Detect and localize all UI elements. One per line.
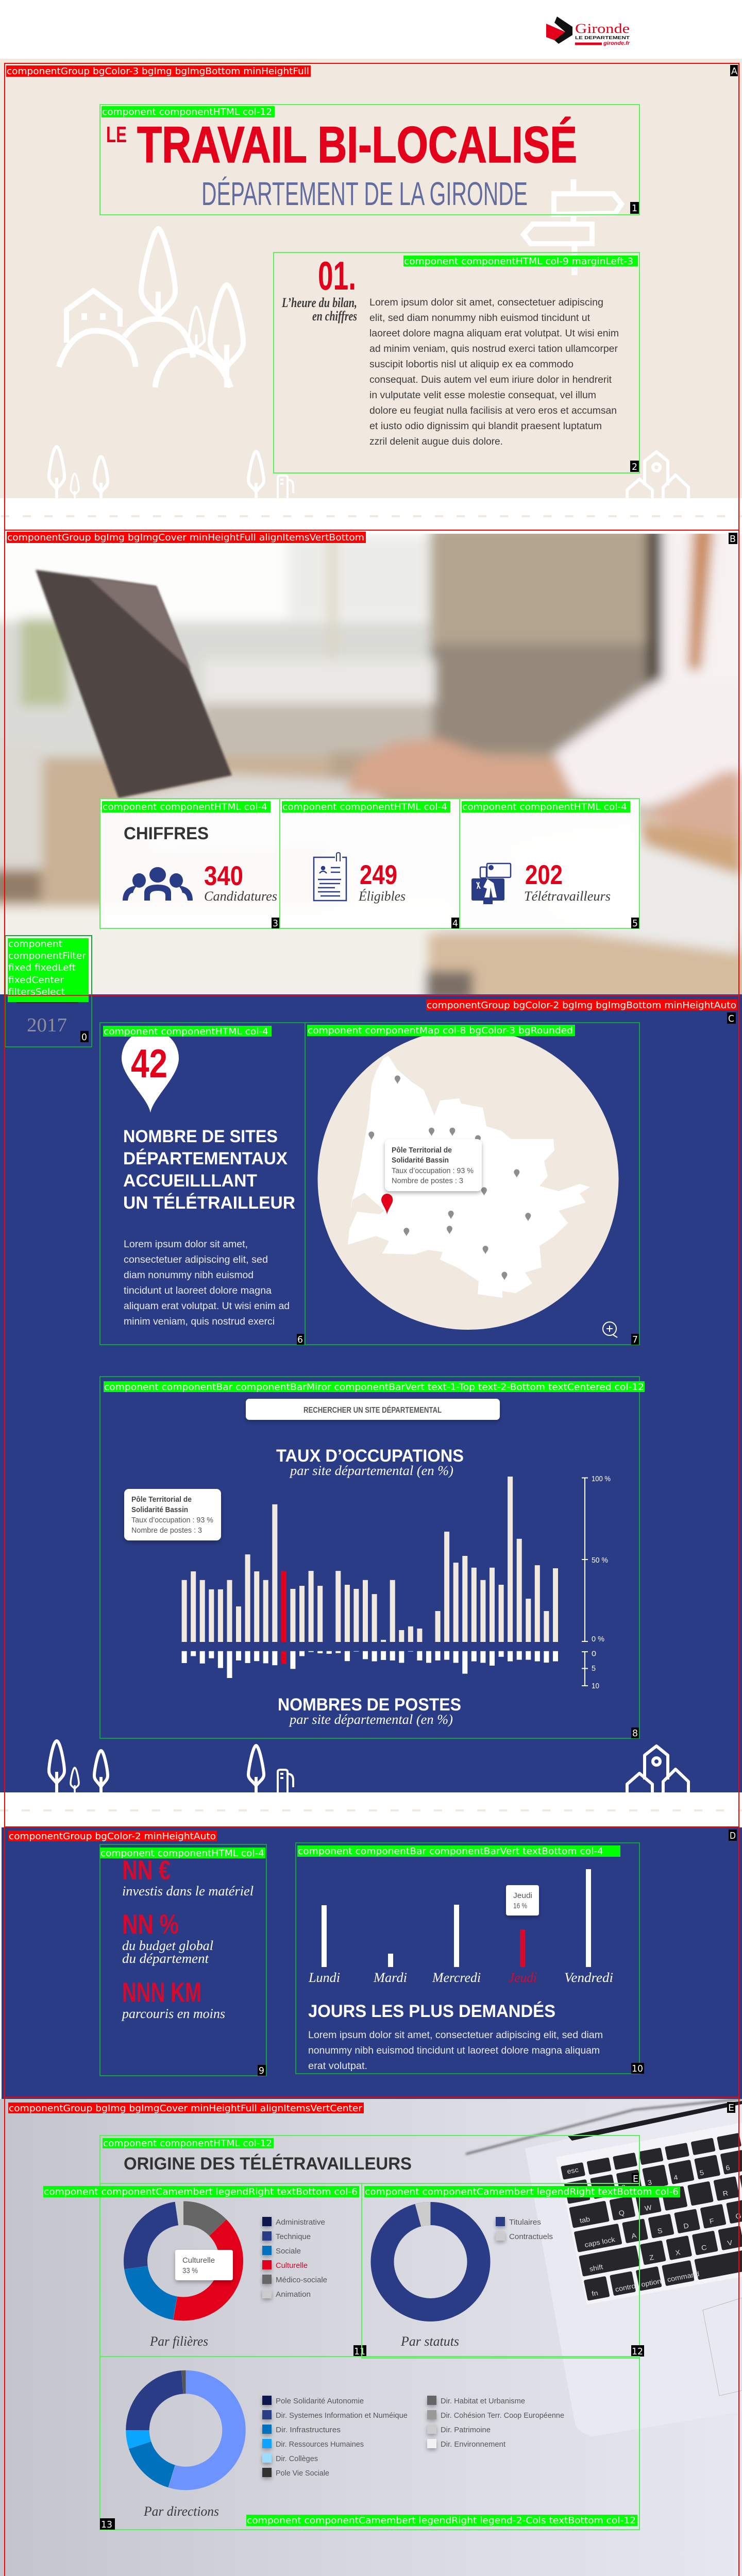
bar chart panel: taux d'occupations et nombres de postes: 8 [632,1728,638,1739]
bar tooltip: Solidarité Bassin [131,1505,188,1514]
dashed road [1,515,742,517]
map tooltip: Nombre de postes : 3 [392,1177,463,1185]
icon: signpost [524,179,621,275]
dashed road [0,1809,742,1811]
panel: jours les plus demandés [296,1843,644,2074]
upper axis: 50 % [592,1556,608,1565]
day bars [322,1869,591,1967]
bar tooltip [124,1489,221,1540]
tag D: componentGroup bgColor-2 minHeightAuto [9,1831,216,1842]
donut: par filières: Par filières [149,2334,208,2349]
day labels: Lundi [308,1970,340,1985]
tag D: D [730,1831,736,1841]
tag B: B [730,534,736,545]
heading: ACCUEILLLANT [123,1171,257,1191]
panel: 42 sites: component componentHTML col-4 [104,1026,268,1037]
tag C: C [728,1013,734,1024]
body text: Lorem ipsum dolor sit amet, consectetuer adipiscing elit, sed diam [308,2030,603,2041]
subtitle: DÉPARTEMENT DE LA GIRONDE [201,175,528,212]
upper bars [182,1477,558,1642]
donut: par statuts [362,2183,680,2358]
panel: key figures [100,1844,266,2076]
panel: chiffres [100,799,640,930]
body text: consectetuer adipiscing elit, sed [124,1255,268,1265]
title panel: 1 [632,203,637,214]
legend: Technique [276,2232,311,2241]
body text: laoreet dolore magna aliquam erat volutpat. Ut wisi enim [369,328,619,339]
day labels [308,1970,613,1985]
donut chart segments [372,2202,490,2321]
map tooltip [385,1139,482,1191]
heading: origine des télétravailleurs: component componentHTML col-12 [103,2138,272,2149]
panel: 42 sites: 6 [297,1334,303,1345]
legend: Dir. Systemes Information et Numéique [276,2411,408,2420]
tag C [426,999,737,1024]
bar tooltip: Taux d’occupation : 93 % [131,1516,213,1524]
icon: document [314,853,346,901]
donut: par directions [100,2357,639,2530]
legend: Contractuels [509,2232,553,2241]
lower axis: 0 [592,1650,596,1658]
body text: consequat. Duis autem vel eum iriure dolor in hendrerit [369,375,612,385]
panel: 42 sites [100,1023,305,1345]
legend: Dir. Ressources Humaines [276,2440,364,2449]
map panel [305,1023,639,1345]
panel: key figures: investis dans le matériel [122,1884,254,1899]
stat: éligibles: 4 [452,918,458,929]
lower mirrored bars [182,1651,558,1678]
stat: candidatures: 340 [204,861,243,891]
tag E: componentGroup bgImg bgImgCover minHeightFull alignItemsVertCenter [9,2103,363,2114]
panel: key figures: NN % [122,1909,179,1940]
keyboard keys [561,2130,742,2301]
chart heading: TAUX D’OCCUPATIONS [276,1446,464,1466]
bar tooltip: Pôle Territorial de [131,1495,192,1504]
legend: Culturelle [276,2261,308,2270]
body text: ad minim veniam, quis nostrud exerci tation ullamcorper [369,344,618,354]
icon: zoom magnifier [603,1322,617,1337]
panel 01: l'heure du bilan: component componentHTML col-9 marginLeft-3 [404,256,633,267]
logo: Gironde le département: Gironde [575,21,630,36]
icon: map pin with number [122,1030,179,1113]
body text: Lorem ipsum dolor sit amet, [124,1239,248,1250]
bar chart panel: taux d'occupations et nombres de postes: par site départemental (en %) [289,1463,453,1478]
panel: key figures: du budget global [122,1938,213,1953]
day labels: Mercredi [432,1970,481,1985]
section C: navy background [0,994,742,1810]
stat: éligibles: Éligibles [358,889,406,904]
legend: Dir. Cohésion Terr. Coop Européenne [441,2411,564,2420]
donut: par filières [43,2183,366,2357]
body text: nonummy nibh euismod tincidunt ut laoreet dolore magna aliquam [308,2045,600,2056]
tag E: E [728,2103,734,2113]
tag A: componentGroup bgColor-3 bgImg bgImgBottom minHeightFull [7,66,309,77]
stat: candidatures: component componentHTML col-4 [103,802,267,812]
grey map pins [368,1076,531,1280]
bar chart panel: taux d'occupations et nombres de postes: component componentBar componentBarMiror componentBarVert text-1-Top text-2-Bottom textCentered col-12 [104,1382,644,1393]
map tooltip: Solidarité Bassin [392,1156,449,1164]
stat: télétravailleurs: Télétravailleurs [524,889,611,904]
donut: par directions: Par directions [143,2504,219,2519]
selected map pin [381,1194,393,1214]
panel 01: l'heure du bilan: 01. [318,253,356,298]
body text [369,297,619,447]
map panel: 7 [632,1334,638,1345]
day labels: Vendredi [564,1970,613,1985]
year filter: component [8,939,62,950]
panel: 42 sites: 42 [131,1041,167,1086]
tooltip: jeudi: Jeudi [513,1891,532,1900]
section A: cream cover [0,59,742,516]
tag A [6,65,738,77]
stat: candidatures: Candidatures [204,889,277,904]
title panel [100,105,639,215]
year filter: 2017 [27,1014,67,1036]
legend: Sociale [276,2247,301,2256]
panel 01: l'heure du bilan: en chiffres [312,309,357,324]
title panel: TRAVAIL BI-LOCALISÉ [137,116,577,173]
donut: par directions: 13 [101,2519,112,2530]
lower axis: 5 [592,1664,596,1673]
icon: people [123,867,193,901]
stat: télétravailleurs: 5 [632,918,638,929]
search box [246,1399,500,1420]
map tooltip: Taux d’occupation : 93 % [392,1166,474,1175]
panel: key figures: NNN KM [122,1977,201,2008]
lower chart heading: NOMBRES DE POSTES [278,1695,461,1715]
trackpad [703,2298,742,2396]
icon: village illustration [59,229,243,387]
donut chart segments [125,2369,246,2491]
heading: chiffres: CHIFFRES [124,824,209,843]
legend: Dir. Patrimoine [441,2426,491,2434]
tag C: componentGroup bgColor-2 bgImg bgImgBottom minHeightAuto [427,1000,736,1011]
body text: Lorem ipsum dolor sit amet, consectetuer adipiscing [369,297,603,308]
donut: par filières: 11 [354,2346,365,2357]
map of Gironde [348,1056,590,1298]
panel 01: l'heure du bilan: L’heure du bilan, [281,295,357,310]
heading: NOMBRE DE SITES [123,1127,278,1146]
year filter: filtersSelect [8,987,65,997]
legend: Dir. Environnement [441,2440,506,2449]
logo: Gironde le département: gironde.fr [603,41,630,46]
year filter: fixedCenter [8,975,64,986]
donut tooltip: Culturelle [182,2256,215,2265]
donut tooltip: 33 % [182,2266,198,2275]
heading: DÉPARTEMENTAUX [123,1149,288,1168]
lower axis [582,1650,599,1690]
panel: key figures: du département [122,1951,209,1966]
heading: origine des télétravailleurs [100,2136,639,2184]
body text: dolore eu feugiat nulla facilisis at vero eros et accumsan [369,405,617,416]
title panel: component componentHTML col-12 [102,107,272,117]
legend: Dir. Collèges [276,2454,318,2463]
panel: key figures: NN € [122,1855,171,1886]
decorative landscape strip [49,447,688,498]
bar tooltip: Nombre de postes : 3 [131,1526,202,1535]
donut: par statuts: component componentCamembert legendRight textBottom col-6 [365,2187,679,2197]
legend: Titulaires [509,2218,541,2227]
stat: éligibles [280,799,460,929]
legend: Pole Vie Sociale [276,2469,329,2478]
bar chart panel: taux d'occupations et nombres de postes: par site départemental (en %) [289,1712,453,1727]
panel: jours les plus demandés: JOURS LES PLUS DEMANDÉS [308,2002,555,2021]
legend: Dir. Habitat et Urbanisme [441,2397,525,2405]
body text: in vulputate velit esse molestie consequat, vel illum [369,390,596,401]
body text: diam nonummy nibh euismod [124,1270,254,1281]
lower axis: 10 [592,1682,599,1690]
section E: photo of laptop keyboard [0,2099,742,2576]
day labels: Mardi [373,1970,407,1985]
tag E [8,2102,735,2114]
donut: par directions: component componentCamembert legendRight legend-2-Cols textBottom col-12 [247,2515,636,2526]
laptop body [525,2134,606,2436]
year filter [5,936,92,1047]
legend: Dir. Infrastructures [276,2426,341,2434]
map tooltip: Pôle Territorial de [392,1146,452,1155]
panel: key figures: parcouris en moins [121,2006,225,2021]
stat: télétravailleurs: component componentHTML col-4 [462,802,627,812]
stat: candidatures [100,799,280,929]
decorative landscape strip [49,1741,688,1792]
legend: Médico-sociale [276,2276,327,2284]
body text: elit, sed diam nonummy nibh euismod tincidunt ut [369,313,591,324]
heading: origine des télétravailleurs: E [633,2174,638,2184]
upper axis: 0 % [592,1635,604,1643]
panel 01: l'heure du bilan [274,252,639,473]
body text: tincidunt ut laoreet dolore magna [124,1285,272,1296]
panel 01: l'heure du bilan: 2 [632,462,637,472]
body text: aliquam erat volutpat. Ut wisi enim ad [124,1301,290,1312]
logo: Gironde le département: LE DEPARTEMENT [575,36,630,40]
body text: erat volutpat. [308,2061,367,2072]
legend [496,2217,553,2241]
tag B: componentGroup bgImg bgImgCover minHeightFull alignItemsVertBottom [7,532,364,543]
tooltip: jeudi [506,1885,539,1916]
upper axis: 100 % [592,1475,611,1483]
legend: Animation [276,2290,311,2299]
donut tooltip [175,2250,233,2280]
legend [262,2217,327,2299]
panel: jours les plus demandés: 10 [632,2063,643,2074]
panel: jours les plus demandés: component componentBar componentBarVert textBottom col-4 [298,1846,603,1857]
donut: par filières: component componentCamembert legendRight textBottom col-6 [44,2187,358,2197]
body text: suscipit lobortis nisl ut aliquip ex ea commodo [369,359,574,370]
donut chart segments [115,2193,251,2329]
section D: navy background [2,1827,742,2099]
legend: Administrative [276,2218,325,2227]
year filter: fixed fixedLeft [8,962,76,973]
body text: zzril delenit augue duis dolore. [369,436,503,447]
body text [308,2030,603,2072]
stat: éligibles: 249 [360,860,397,890]
icon: telework [471,863,511,904]
stat: candidatures: 3 [273,918,278,929]
stat: éligibles: component componentHTML col-4 [282,802,447,812]
body text: minim veniam, quis nostrud exerci [124,1316,275,1327]
heading: origine des télétravailleurs: ORIGINE DES TÉLÉTRAVAILLEURS [124,2154,412,2174]
body text [124,1239,290,1327]
tooltip: jeudi: 16 % [513,1902,527,1910]
day labels: Jeudi [509,1970,537,1985]
legend: Pole Solidarité Autonomie [276,2397,364,2405]
logo: Gironde le département [546,16,630,46]
stat: télétravailleurs [460,799,639,929]
panel: key figures: 9 [259,2065,264,2076]
map panel: component componentMap col-8 bgColor-3 bgRounded [308,1025,573,1036]
tag B [7,532,737,545]
heading: UN TÉLÉTRAILLEUR [123,1193,295,1213]
year filter: componentFilter [8,951,87,961]
search box: RECHERCHER UN SITE DÉPARTEMENTAL [303,1405,442,1415]
donut: par statuts: 12 [632,2346,643,2357]
title: le travail bi-localisé: LE [106,122,127,147]
stat: télétravailleurs: 202 [525,860,563,890]
year filter: 0 [81,1032,87,1043]
body text: et iusto odio dignissim qui blandit praesent luptatum [369,421,602,432]
upper axis [582,1475,611,1643]
section B: photo of laptop and hands [0,526,742,1005]
bar chart panel: taux d'occupations et nombres de postes [100,1377,645,1739]
panel: key figures: component componentHTML col-4 [100,1848,264,1859]
heading [123,1127,295,1213]
legend [262,2396,564,2478]
tag D [8,1829,737,1842]
tag A: A [731,66,738,77]
donut: par statuts: Par statuts [400,2334,459,2349]
